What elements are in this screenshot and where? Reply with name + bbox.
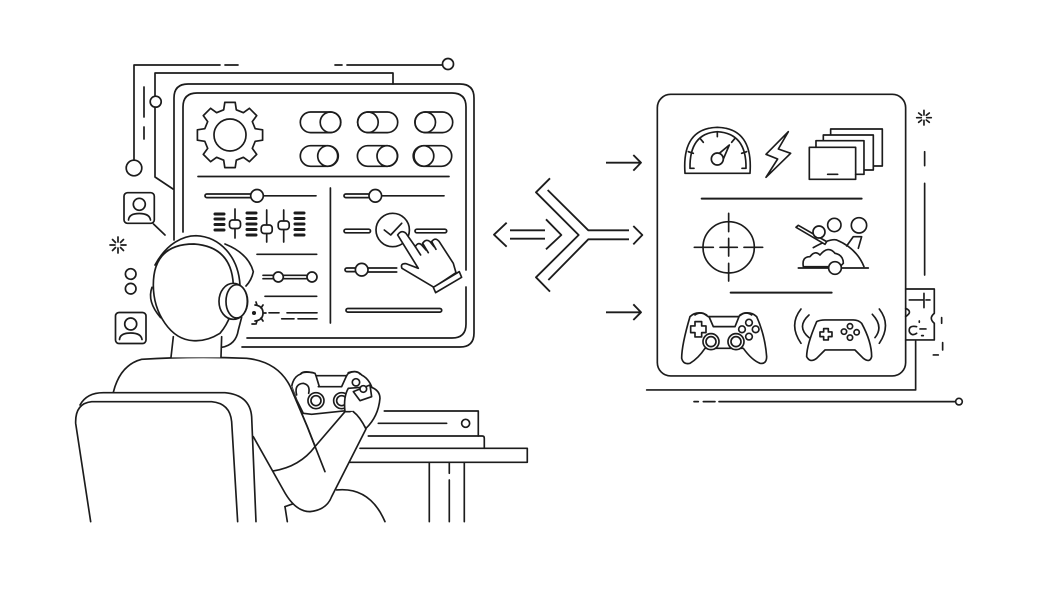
icon: pointing hand — [398, 232, 462, 293]
panel: settings monitor — [174, 84, 474, 347]
arrow: bottom — [606, 304, 641, 320]
small gear, partly hidden — [252, 302, 266, 324]
headset ear cup — [219, 283, 248, 319]
icon: multiplayer battle scene — [796, 218, 868, 274]
merge and split arrows — [494, 155, 642, 320]
shoulder outline — [113, 357, 325, 472]
torso — [113, 357, 325, 522]
icon: sparkle right — [917, 110, 931, 125]
icon: crosshair — [694, 213, 763, 281]
arrow: top — [606, 155, 641, 171]
icon: sparkle left — [110, 237, 126, 253]
icon: lightning bolt — [766, 132, 791, 177]
icon: settings gear — [197, 102, 263, 168]
right sliders — [344, 190, 447, 312]
icon: wireless controller — [795, 309, 885, 360]
status dots — [125, 269, 136, 294]
chair — [76, 393, 256, 522]
toggle switches — [300, 112, 453, 166]
arm — [253, 387, 385, 522]
hand on controller — [345, 379, 380, 428]
equalizer — [215, 209, 304, 242]
panel: game results — [657, 94, 906, 376]
neck — [171, 335, 222, 357]
left sliders — [205, 190, 317, 319]
circuit block and wires: right — [647, 110, 962, 405]
desk and console — [350, 411, 527, 522]
icon: user card lower — [116, 312, 146, 344]
head — [153, 244, 234, 341]
icon: game controller — [682, 313, 767, 364]
connector wires: left — [126, 58, 453, 189]
person with headset — [76, 236, 527, 522]
hair and headband — [155, 236, 253, 286]
icon: speedometer — [685, 127, 750, 173]
icon: user card upper — [124, 193, 165, 235]
icon: stacked windows — [809, 129, 882, 179]
left decorations — [110, 193, 165, 344]
icon: checkmark button — [376, 213, 409, 247]
game controller in hands — [292, 372, 372, 414]
